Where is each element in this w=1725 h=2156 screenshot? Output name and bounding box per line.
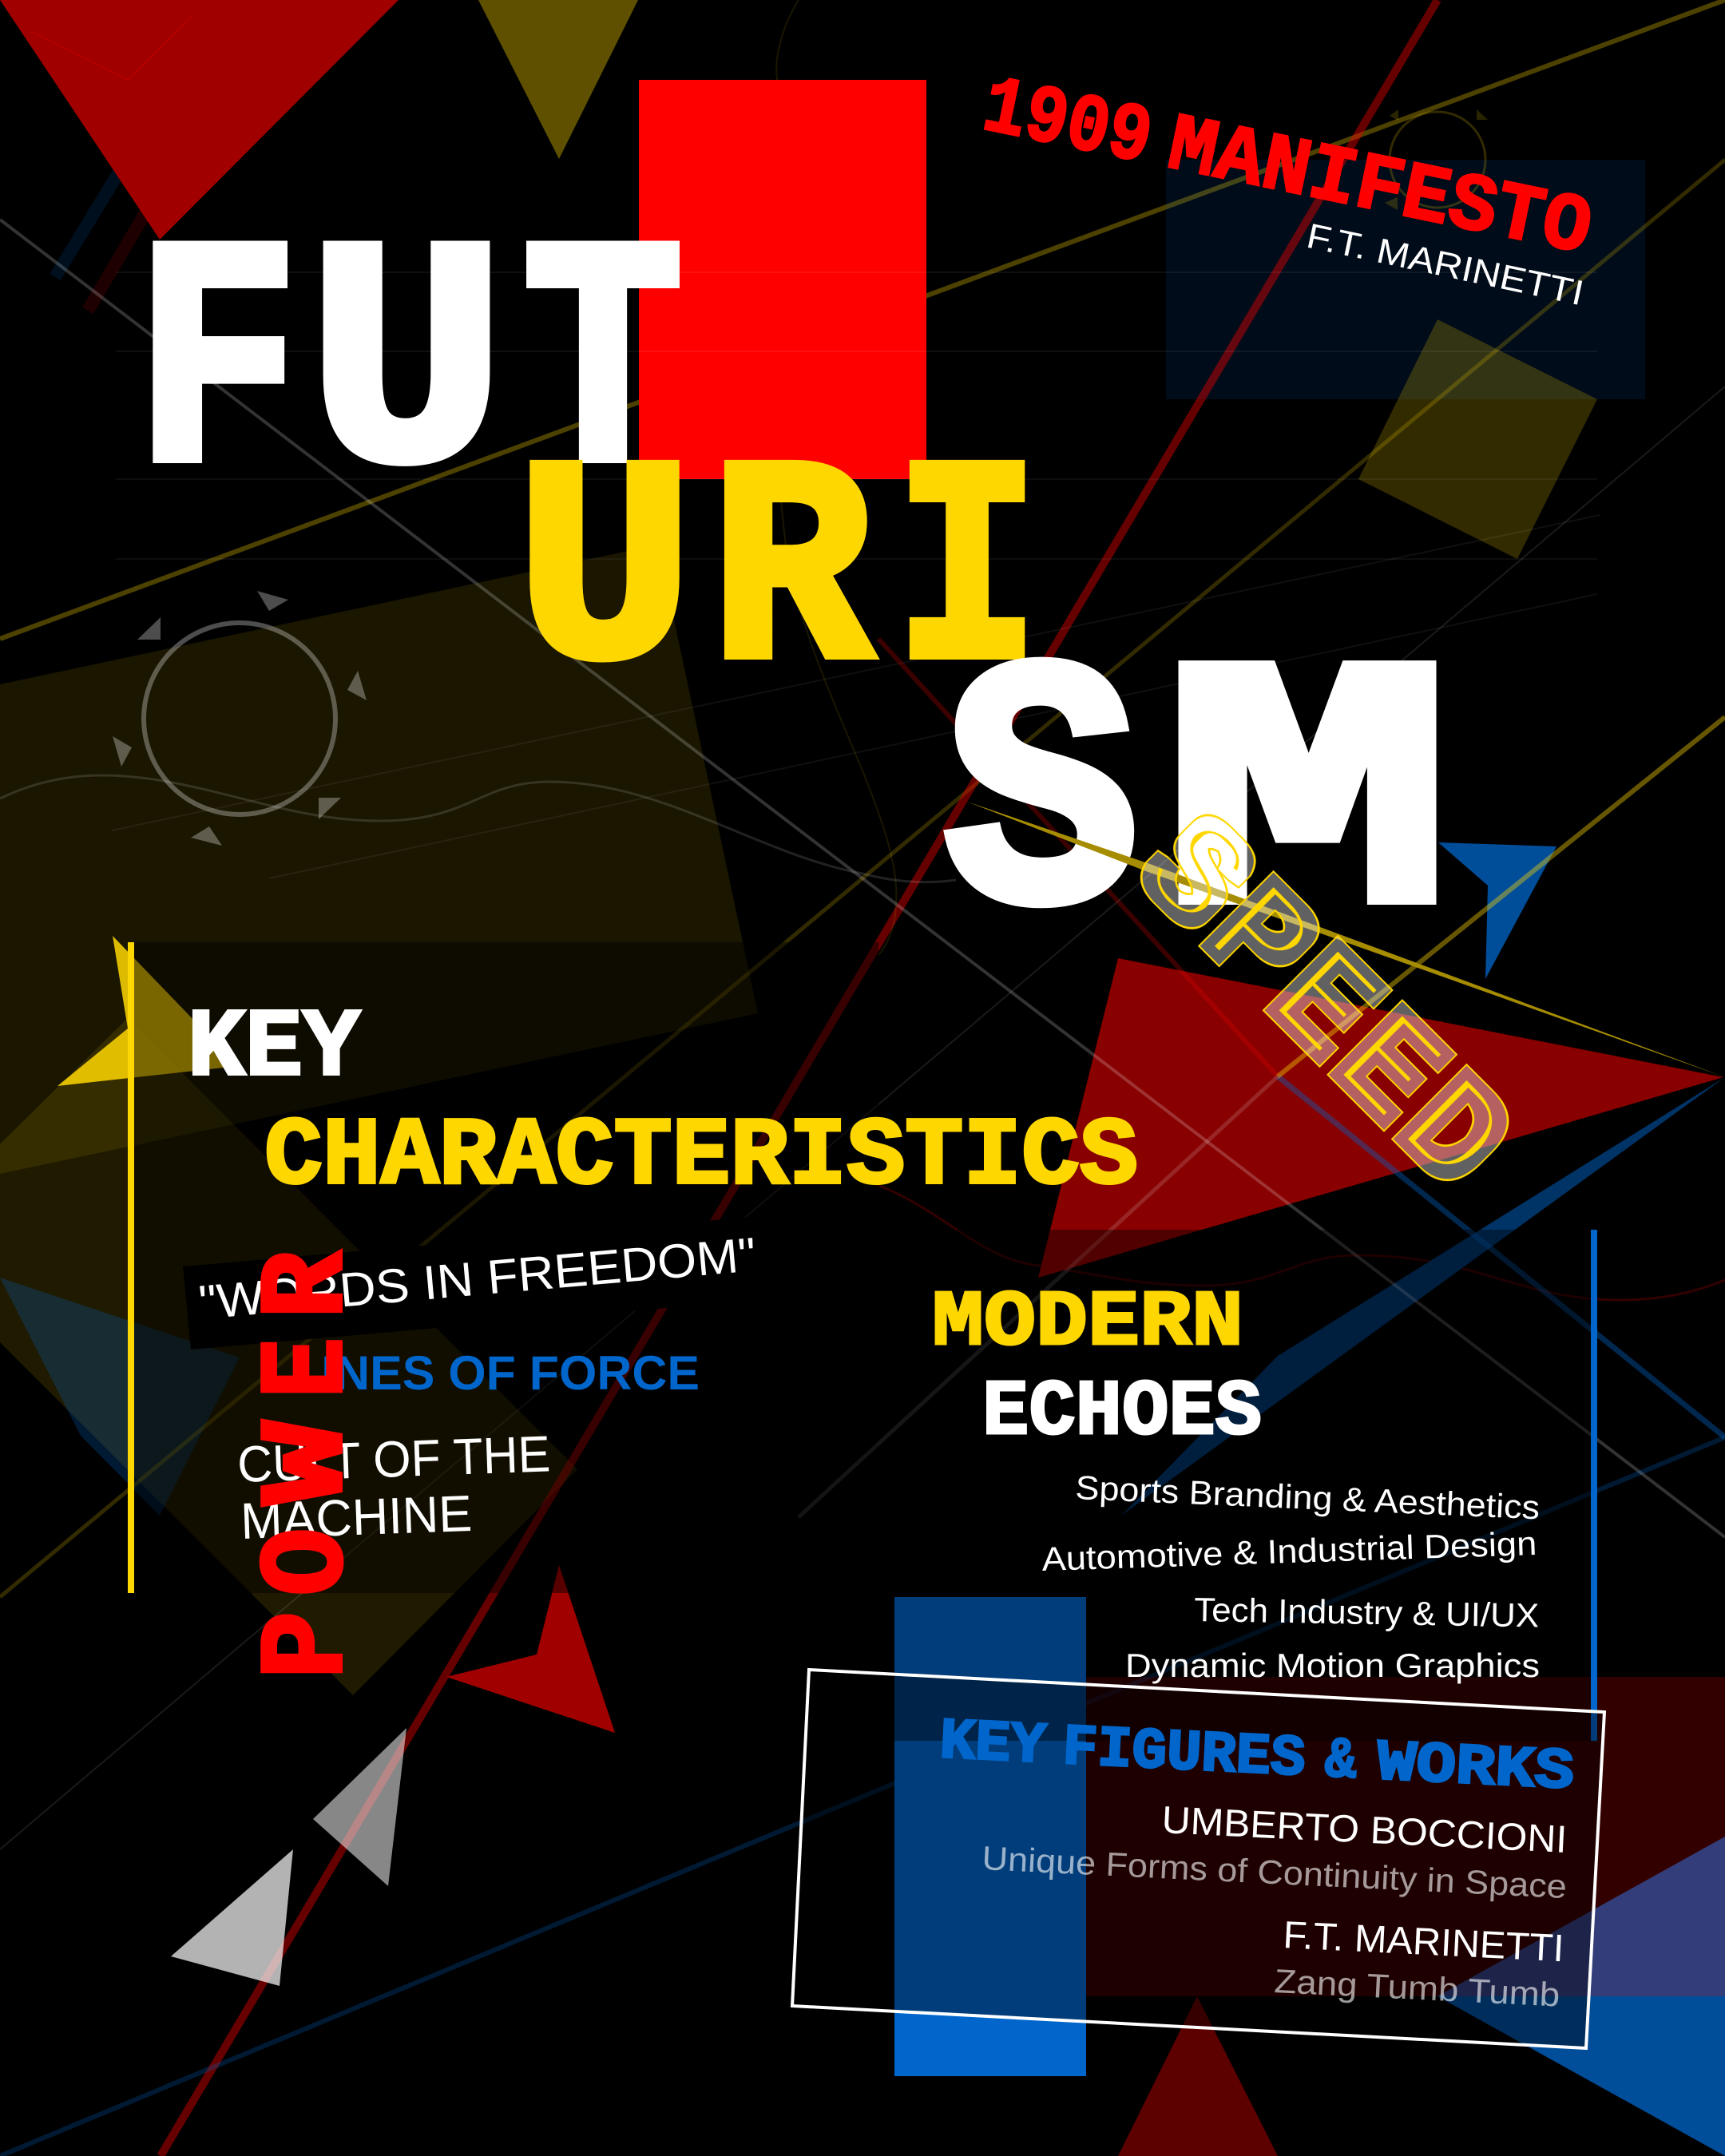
vertical word power: O	[241, 1528, 377, 1596]
navy rectangle	[1166, 160, 1645, 399]
olive square tilted	[1358, 319, 1597, 559]
gold line two	[0, 160, 1725, 1597]
panel: key figures and works frame	[792, 1670, 1604, 2048]
small circle with triangles top right	[1385, 109, 1488, 210]
gold tapered line	[967, 802, 1725, 1077]
heading 1909 manifesto	[975, 61, 1599, 277]
title line one: FUT: T	[523, 192, 683, 553]
vertical word power	[241, 1250, 378, 1679]
panel: modern echoes	[878, 1230, 1597, 1741]
blue tall rectangle	[894, 1597, 1086, 2076]
faint bolt in red triangle	[30, 17, 192, 80]
list: modern echoes: Sports Branding & Aesthetics	[1075, 1468, 1541, 1526]
figure: marinetti	[1274, 1914, 1565, 2014]
olive diamond left	[0, 1018, 577, 1695]
figure: marinetti: Zang Tumb Tumb	[1274, 1962, 1560, 2014]
dark red rectangle	[1086, 1677, 1725, 1996]
faint arc	[772, 0, 896, 955]
title line three: SM: M	[1164, 606, 1451, 1004]
light triangle	[171, 1849, 293, 1986]
vertical word power: E	[241, 1338, 377, 1398]
title line two: URI: R	[712, 416, 874, 741]
grey triangle	[313, 1728, 406, 1886]
heading echoes: ECHOES	[982, 1369, 1262, 1457]
item: words in freedom: "WORDS IN FREEDOM"	[196, 1227, 758, 1330]
circle with orbiting triangles	[113, 591, 367, 846]
background streak: red	[88, 208, 149, 311]
heading key: KEY	[188, 995, 360, 1104]
blue line low	[0, 1437, 1725, 2156]
background streak: blue	[55, 171, 120, 277]
black label behind words in freedom	[183, 1215, 786, 1349]
yellow arrow	[58, 936, 238, 1086]
title line one: FUT: U	[309, 192, 504, 553]
teal blue shard	[0, 1278, 240, 1516]
title line three: SM	[945, 606, 1451, 1004]
vertical word power: R	[241, 1250, 377, 1319]
title line one: FUT: F	[136, 192, 299, 553]
red wavy line	[862, 1179, 1725, 1300]
red triangle top left	[0, 0, 399, 240]
title line one: FUT	[136, 192, 683, 553]
list: modern echoes	[1041, 1468, 1541, 1684]
list: modern echoes: Automotive & Industrial Design	[1041, 1524, 1537, 1578]
heading modern: MODERN	[932, 1279, 1243, 1368]
speed text: SPEED	[1109, 795, 1533, 1219]
blue triangle bottom right	[1438, 1837, 1725, 2156]
blue arrow upper right	[1438, 842, 1556, 979]
heading key figures and works: KEY	[938, 1709, 1049, 1780]
wavy line	[0, 775, 956, 882]
olive triangle top	[478, 0, 638, 159]
vertical word power: W	[242, 1420, 378, 1505]
list: modern echoes: Tech Industry & UI/UX	[1194, 1591, 1540, 1635]
heading key figures and works	[938, 1709, 1576, 1805]
olive tilted band	[0, 545, 758, 1174]
heading key figures and works: WORKS	[1375, 1730, 1576, 1805]
item: lines of force: LINES OF FORCE	[291, 1346, 700, 1400]
item: cult of the machine: CULT OF THE	[236, 1425, 551, 1493]
big red triangle	[1038, 958, 1723, 1278]
list: modern echoes: Dynamic Motion Graphics	[1125, 1647, 1540, 1684]
figure: boccioni: UMBERTO BOCCIONI	[1160, 1799, 1568, 1861]
figure: marinetti: F.T. MARINETTI	[1282, 1914, 1565, 1970]
vertical word power: P	[241, 1611, 377, 1679]
title line two: URI: U	[517, 416, 692, 741]
heading key figures and works: FIGURES	[1061, 1715, 1307, 1793]
item: cult of the machine	[236, 1425, 551, 1550]
converging lines	[0, 220, 1725, 1849]
author: F.T. MARINETTI	[1303, 216, 1587, 313]
heading 1909 manifesto: 1909	[975, 61, 1160, 186]
red rectangle behind title	[639, 80, 926, 479]
title line two: URI: I	[895, 416, 1039, 741]
item: cult of the machine: MACHINE	[240, 1484, 473, 1550]
long gold line	[0, 0, 1725, 639]
panel: key characteristics	[128, 942, 878, 1593]
main red diagonal line	[161, 0, 1438, 2156]
dark red triangle bottom	[1118, 1996, 1278, 2156]
faint horizontal speed lines	[112, 272, 1600, 878]
heading 1909 manifesto: MANIFESTO	[1160, 100, 1599, 277]
heading key figures and works: &	[1323, 1728, 1358, 1795]
heading characteristics: CHARACTERISTICS	[264, 1104, 1138, 1212]
title line two: URI	[517, 416, 1039, 741]
figure: boccioni	[981, 1799, 1568, 1905]
long blue shard	[1121, 1077, 1725, 1516]
title line three: SM: S	[945, 606, 1138, 1004]
figure: boccioni: Unique Forms of Continuity in Space	[981, 1839, 1568, 1905]
red arrow	[446, 1565, 615, 1733]
